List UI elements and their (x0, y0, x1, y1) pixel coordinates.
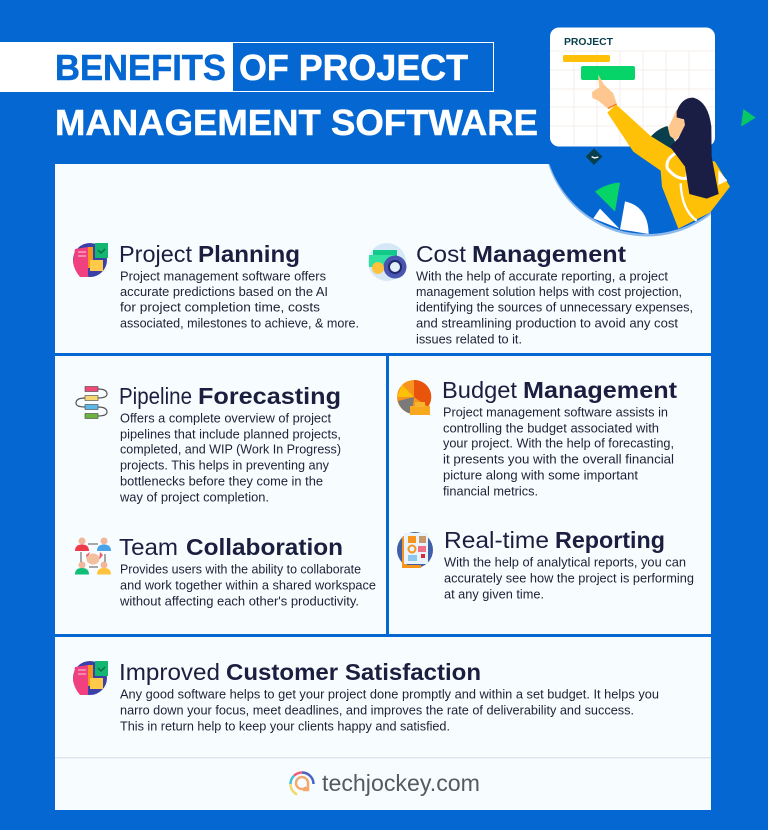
text block (416, 268, 693, 346)
text block: accurate predictions based on the AI (120, 284, 328, 299)
heading: Improved (119, 659, 220, 685)
text block: financial metrics. (443, 484, 538, 498)
project board: PROJECT (564, 36, 614, 48)
heading: Pipeline (119, 383, 192, 409)
text block: bottlenecks before they come in the (120, 474, 323, 488)
main content panel (55, 164, 711, 810)
text block: Offers a complete overview of project (120, 410, 331, 426)
heading (444, 527, 665, 553)
text block (119, 410, 341, 504)
icon: money and gear (368, 243, 406, 281)
text block: way of project completion. (119, 490, 269, 504)
text block (443, 404, 674, 498)
heading: Forecasting (198, 383, 341, 409)
text block: With the help of analytical reports, you can (444, 554, 686, 570)
text block: issues related to it. (416, 332, 522, 346)
text block: your project. With the help of forecasting, (443, 436, 674, 450)
face (668, 109, 687, 141)
panel: team collaboration (75, 534, 376, 608)
heading: Collaboration (186, 534, 343, 560)
text block: at any given time. (444, 586, 544, 602)
text block: it presents you with the overall financial (443, 452, 674, 466)
heading (119, 241, 300, 267)
panel: pipeline forecasting (76, 383, 341, 504)
heading: Customer Satisfaction (226, 659, 481, 685)
icon: analytics report (397, 532, 433, 568)
white pie wedges (620, 201, 649, 234)
hand pointing (592, 74, 617, 109)
text block: Project management software offers (120, 268, 326, 284)
text block (120, 686, 659, 734)
panel grid dividers (55, 353, 711, 758)
panel: project planning (73, 241, 359, 330)
hair (670, 98, 719, 199)
dark shape behind person (651, 126, 677, 150)
text block: without affecting each other's productivity. (119, 594, 359, 608)
heading: Planning (198, 241, 300, 267)
text block (119, 562, 376, 608)
text block (120, 268, 359, 330)
text block: Any good software helps to get your project done promptly and within a set budget. It helps you (120, 686, 659, 702)
icon: sticky notes (73, 661, 108, 695)
heading: Reporting (555, 527, 665, 553)
text block: projects. This helps in preventing any (120, 458, 329, 472)
text block: for project completion time, costs (120, 300, 321, 314)
icon: techjockey logo (290, 772, 314, 794)
heading: Budget (442, 377, 517, 403)
icon: sticky notes (73, 243, 108, 277)
icon: pie chart and coins (397, 380, 431, 415)
text block: Provides users with the ability to collaborate (120, 562, 361, 576)
blue circle backdrop (548, 164, 711, 236)
green wedge (595, 183, 620, 212)
heading: Project (119, 241, 192, 267)
panel: improved customer satisfaction (73, 659, 659, 734)
heading (119, 659, 481, 685)
text block (444, 554, 694, 602)
title banner: OF PROJECT (239, 47, 468, 88)
text block: completed, and WIP (Work In Progress) (120, 442, 341, 456)
text block: identifying the sources of unnecessary expenses, (416, 300, 693, 314)
heading: Cost (416, 241, 466, 267)
panel: cost management (368, 241, 693, 346)
title banner: BENEFITS (55, 47, 226, 88)
footer brand: techjockey.com (322, 770, 480, 796)
heading (119, 383, 341, 409)
panel: real-time reporting (397, 527, 694, 602)
heading: Management (523, 377, 677, 403)
heading: Management (472, 241, 626, 267)
text block: associated, milestones to achieve, & more. (120, 316, 359, 330)
heading: Real-time (444, 527, 549, 553)
green triangle (741, 109, 756, 127)
text block: picture along with some important (443, 468, 638, 482)
title banner: MANAGEMENT SOFTWARE (55, 102, 538, 143)
text block: and work together within a shared workspace (120, 578, 376, 592)
text block: management solution helps with cost projection, (416, 284, 682, 299)
text block: narro down your focus, meet deadlines, and improves the rate of deliverability and success. (120, 702, 634, 718)
text block: pipelines that include planned projects, (120, 426, 341, 442)
heading: Team (119, 534, 178, 560)
text block: Project management software assists in (443, 404, 668, 420)
heading (119, 534, 343, 560)
text block: With the help of accurate reporting, a project (416, 268, 668, 284)
text block: controlling the budget associated with (443, 420, 659, 436)
illustration: person pointing at project board (544, 28, 756, 236)
text block: accurately see how the project is performing (444, 570, 694, 586)
text block: This in return help to keep your clients happy and satisfied. (120, 718, 450, 734)
yellow sweater and arm (607, 104, 730, 229)
diamond marker (586, 148, 602, 165)
icon: pipeline steps (76, 386, 107, 418)
heading (442, 377, 677, 403)
heading (416, 241, 626, 267)
project board (550, 28, 715, 146)
title banner (0, 42, 538, 143)
text block: and streamlining production to avoid any cost (416, 316, 678, 330)
sweater white accents (667, 152, 687, 179)
panel: budget management (397, 377, 677, 498)
icon: team handshake (75, 538, 111, 574)
